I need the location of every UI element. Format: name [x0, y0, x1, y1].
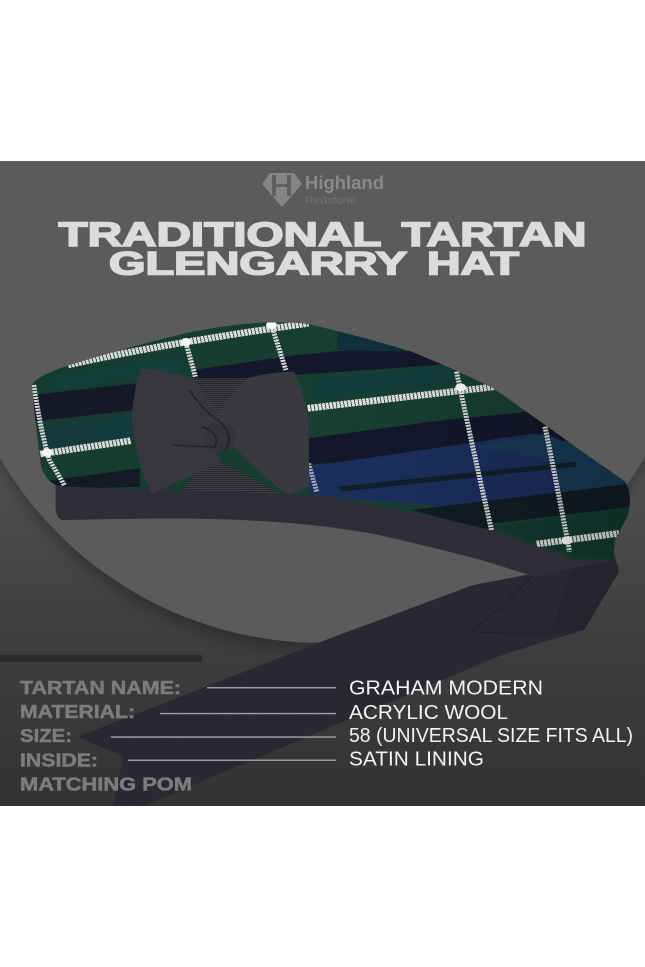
spec row: tartan name: TARTAN NAME: [20, 677, 181, 698]
spec row: material: MATERIAL: [20, 701, 135, 722]
infographic [0, 161, 645, 806]
title line 1: TRADITIONAL [58, 216, 382, 254]
spec row: tartan name [20, 677, 543, 700]
spec row: tartan name: GRAHAM MODERN [349, 678, 543, 700]
tartan crown [25, 320, 642, 567]
title [58, 216, 586, 282]
logo diamond mark [262, 173, 302, 207]
logo [262, 173, 384, 207]
logo sub wordmark: Redstone [305, 194, 356, 206]
lower dark checks [411, 483, 633, 530]
hat band [56, 485, 613, 577]
spec row: inside: SATIN LINING [349, 748, 484, 770]
blue band [308, 433, 633, 507]
logo wordmark: Highland [305, 173, 384, 193]
spec row: size: SIZE: [20, 725, 72, 746]
title line 1 [58, 216, 586, 254]
teal checks [45, 413, 136, 448]
dark navy checks [33, 383, 136, 422]
spec row: material: ACRYLIC WOOL [349, 702, 508, 724]
title line 2: GLENGARRY [109, 246, 407, 282]
title line 1: TARTAN [402, 216, 586, 254]
hat [25, 320, 642, 577]
spec row: matching pom: MATCHING POM [20, 774, 192, 794]
hat tail ribbon [78, 527, 619, 807]
spec row: size: 58 (UNIVERSAL SIZE FITS ALL) [349, 725, 633, 747]
title line 2: HAT [427, 246, 520, 282]
spec row: material [20, 701, 508, 724]
white stripes [34, 323, 619, 552]
title line 2 [109, 246, 520, 282]
hat bow [132, 368, 309, 495]
spec row: inside: INSIDE: [20, 750, 98, 770]
spec row: inside [20, 748, 484, 770]
spec table [20, 677, 633, 794]
stripe crossings [42, 321, 572, 545]
light circle backdrop [0, 161, 645, 643]
background panel [0, 161, 645, 806]
spec row: size [20, 725, 633, 747]
dark divider bar [0, 655, 202, 662]
